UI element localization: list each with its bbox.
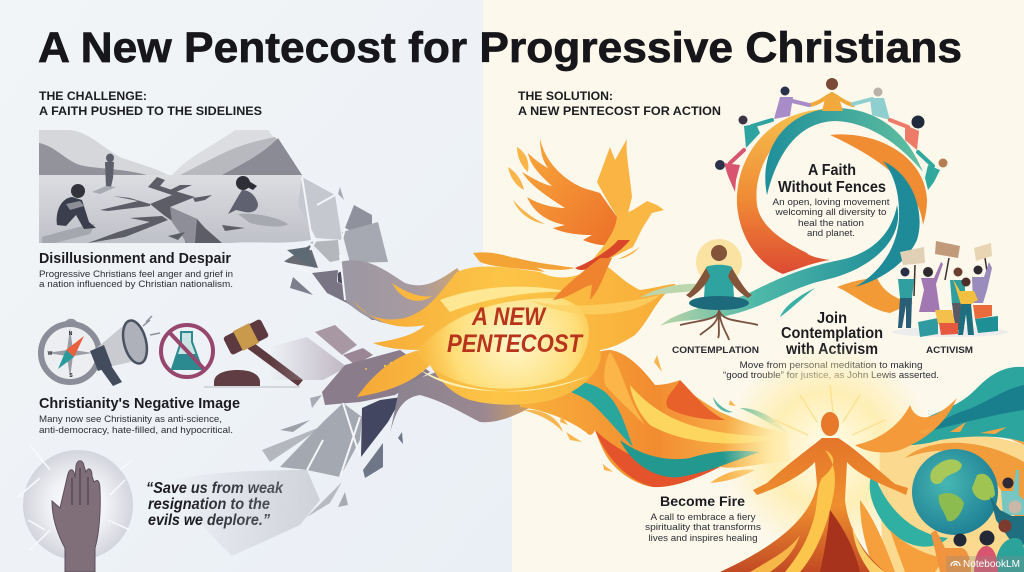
- text: become fire description: lives and inspires healing: [648, 533, 758, 544]
- heading: join contemplation with activism: with Activism: [785, 341, 878, 358]
- heading: the challenge: A FAITH PUSHED TO THE SIDELINES: [39, 104, 262, 118]
- lower flame flow with teal stripes: [520, 350, 790, 487]
- illustration: crowd raising hands: [931, 470, 1024, 572]
- figure: body: [720, 438, 908, 572]
- swirl: teal under globe: [870, 470, 948, 547]
- watermark: notebooklm: [946, 556, 1024, 572]
- shattering fragments transition: [170, 177, 545, 556]
- central flame: [353, 252, 676, 405]
- phoenix main wing: [522, 138, 618, 245]
- figure: flame highlights: [785, 450, 835, 572]
- icon: crossed-out flask: [161, 325, 213, 377]
- heading: a faith without fences: Without Fences: [778, 179, 886, 196]
- text: negative image description: [39, 414, 233, 436]
- central label: a new pentecost: A NEW: [471, 303, 547, 331]
- figure: distant standing person: [92, 154, 116, 194]
- heading: join contemplation with activism: Join: [817, 310, 847, 327]
- phoenix body and head: [590, 201, 664, 263]
- phoenix back wing: [597, 139, 632, 217]
- illustration: meditating figure with roots: [680, 239, 758, 340]
- heading: join contemplation with activism: Contemplation: [781, 325, 883, 342]
- heading: become fire: Become Fire: [660, 493, 745, 509]
- ribbon: teal tail to meditator: [660, 205, 898, 326]
- person: pink shirt: [715, 150, 744, 192]
- crowd: raised arm person top right: [1001, 470, 1024, 515]
- crowd: front person left: [931, 530, 971, 572]
- panel: the solution: [518, 78, 1024, 572]
- text: faith without fences description: [772, 197, 890, 239]
- ribbon: teal top: [765, 108, 923, 195]
- icon: compass: W: [48, 351, 53, 357]
- text: disillusionment description: [39, 269, 233, 290]
- quote: evils we deplore.”: [148, 512, 270, 529]
- swirl: teal mass: [880, 367, 1024, 446]
- activist: yellow shirt front: [953, 278, 978, 335]
- text: faith without fences description: An open, loving movement: [772, 197, 890, 208]
- text: faith without fences description: heal the nation: [798, 218, 864, 229]
- icon: gavel: [204, 318, 303, 387]
- text: become fire description: A call to embrace a fiery: [650, 512, 756, 523]
- illustration: figure of fire: [720, 385, 908, 572]
- text: negative image description: Many now see Christianity as anti-science,: [39, 414, 222, 425]
- text: join description: “good trouble” for justice, as John Lewis asserted.: [723, 370, 939, 381]
- ribbon: orange left: [737, 109, 830, 274]
- flow: orange streak: [604, 352, 645, 425]
- watermark: notebooklm: NotebookLM: [963, 559, 1020, 570]
- text: disillusionment description: Progressive Christians feel anger and grief in: [39, 269, 233, 280]
- illustration: globe: [912, 449, 998, 535]
- swirl: warm base: [880, 434, 1024, 572]
- flow: yellow streak: [630, 385, 782, 443]
- person: purple shirt: [774, 86, 809, 119]
- swirl: orange accents: [918, 422, 1024, 445]
- ribbon: lower tip: [780, 288, 815, 317]
- heading: the challenge: [39, 89, 262, 118]
- grey-purple lower band: [390, 360, 545, 433]
- person: teal shirt: [738, 116, 772, 148]
- quote: resignation to the: [148, 496, 270, 513]
- ground crack: [88, 177, 245, 243]
- heading: join contemplation with activism: [781, 310, 883, 358]
- flow: drops: [523, 355, 755, 483]
- label: contemplation: CONTEMPLATION: [672, 345, 759, 355]
- ribbon: teal right curl: [855, 161, 920, 287]
- flow: teal stripe upper: [548, 381, 633, 447]
- activist: purple shirt right: [972, 262, 992, 303]
- activist: teal shirt left: [898, 268, 914, 328]
- text: disillusionment description: a nation influenced by Christian nationalism.: [39, 279, 233, 290]
- people holding hands around ring: [715, 78, 948, 192]
- grey-purple upper band: [340, 260, 470, 325]
- quote: [146, 480, 284, 529]
- ribbons: swirling ring: [640, 108, 927, 326]
- flow: orange base: [520, 350, 790, 487]
- text: join description: [723, 360, 939, 381]
- person: coral shirt: [890, 116, 924, 150]
- heading: the solution: [518, 89, 721, 118]
- figure: light rays: [775, 385, 885, 435]
- icon: compass: [41, 320, 99, 382]
- title: A New Pentecost for Progressive Christians: [38, 24, 962, 72]
- blocks: [918, 305, 998, 337]
- swirl: orange ring around globe: [905, 443, 1024, 540]
- illustration: activists with signs and blocks: [892, 241, 1008, 337]
- crowd: front person right: [995, 520, 1024, 572]
- person: elder in pale teal: [853, 88, 890, 120]
- phoenix wisps: [508, 147, 545, 224]
- ribbon: orange right: [830, 134, 927, 225]
- text: negative image description: anti-democracy, hate-filled, and hypocritical.: [39, 425, 233, 436]
- swirl: orange lower: [860, 500, 945, 572]
- label: activism: ACTIVISM: [926, 345, 973, 355]
- illustration: cracked ground and despairing figures: [39, 130, 311, 243]
- icon: megaphone: [90, 316, 160, 386]
- heading: christianity's negative image: Christianity's Negative Image: [39, 395, 240, 412]
- heading: the challenge: THE CHALLENGE:: [39, 89, 147, 103]
- panel: the challenge: [18, 89, 311, 572]
- person: teal right: [918, 152, 948, 190]
- heading: disillusionment and despair: Disillusionment and Despair: [39, 250, 231, 267]
- flow: teal stripe lower: [620, 440, 760, 477]
- activist: dark trousers: [950, 268, 965, 330]
- heading: a faith without fences: [778, 162, 886, 196]
- activist: purple dress: [919, 262, 943, 312]
- text: join description: Move from personal meditation to making: [740, 360, 922, 371]
- heading: the solution: THE SOLUTION:: [518, 89, 613, 103]
- ribbon: orange lower: [837, 278, 913, 313]
- ribbon: upper pale tail: [640, 284, 705, 298]
- phoenix: [508, 138, 664, 300]
- illustration: swirling flames behind the globe: [855, 367, 1024, 572]
- icon: raised hand in cracked halo: [18, 445, 133, 572]
- text: become fire description: spirituality that transforms: [645, 522, 761, 533]
- text: faith without fences description: and planet.: [807, 228, 855, 239]
- central label: a new pentecost: [447, 303, 584, 358]
- central label: a new pentecost: PENTECOST: [447, 330, 584, 358]
- phoenix tail: [553, 258, 612, 300]
- phoenix red accent: [575, 240, 630, 270]
- swirl: orange flame: [855, 398, 957, 452]
- icon: compass: N: [69, 331, 73, 337]
- figure: head: [821, 412, 839, 436]
- crowd: elder: [990, 496, 1024, 545]
- heading: the solution: A NEW PENTECOST FOR ACTION: [518, 104, 721, 118]
- figure: seated woman, head in hands: [228, 176, 288, 227]
- heading: a faith without fences: A Faith: [808, 162, 856, 179]
- figure: seated man, head in arms: [42, 184, 96, 243]
- text: become fire description: [645, 512, 761, 544]
- quote: “Save us from weak: [146, 480, 284, 497]
- icon: compass: S: [69, 373, 73, 379]
- signs: [900, 241, 992, 296]
- text: faith without fences description: welcoming all diversity to: [774, 207, 886, 218]
- flow: red upper flare: [666, 380, 725, 420]
- glow behind figure: [723, 345, 933, 555]
- background: left cool half: [0, 0, 512, 572]
- swirl: dark teal stripe: [925, 385, 1024, 432]
- flow: teal wisps: [713, 397, 787, 433]
- person: orange dress: [810, 78, 853, 111]
- crowd: front person centre: [974, 530, 998, 572]
- flow: red lower edge: [595, 430, 720, 487]
